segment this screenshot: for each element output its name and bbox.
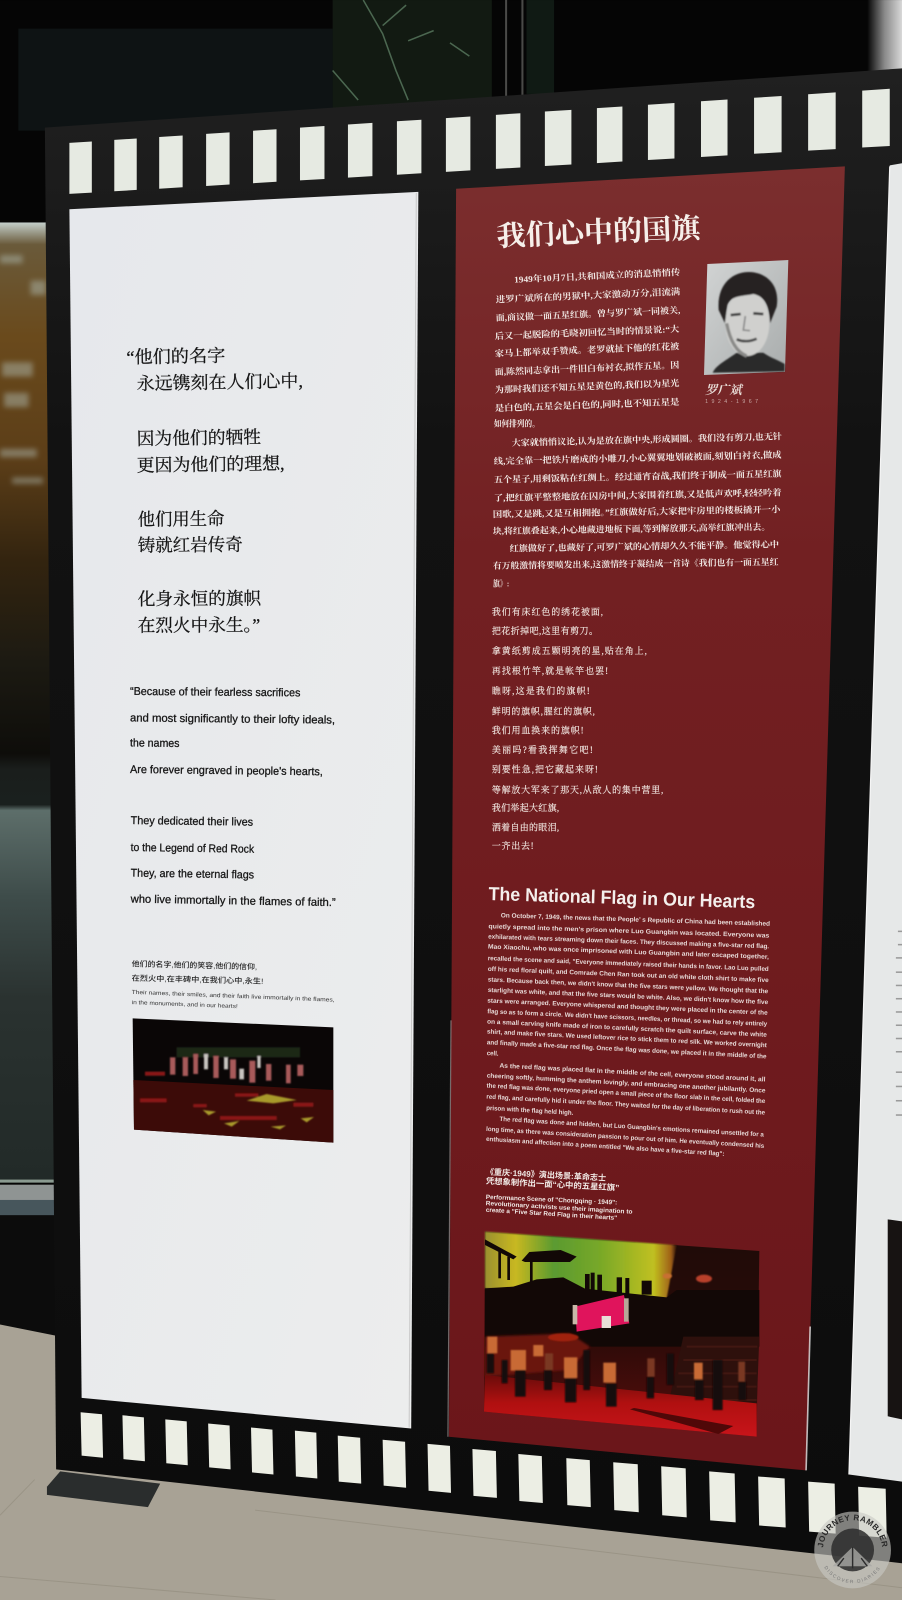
chinese story text: 线,完全靠一把铁片磨成的小雕刀,小心翼翼地划破被面,刻划白衬衣,做成 bbox=[494, 449, 782, 466]
chinese heading: 我们心中的国旗 bbox=[496, 213, 703, 253]
english quote: the names bbox=[130, 737, 180, 750]
english quote: and most significantly to their lofty ideals, bbox=[130, 712, 335, 727]
english story text: enthusiasm and affection into a poem entitled "We also have a five-star red flag": bbox=[486, 1136, 725, 1158]
small english caption: in the monuments, and in our hearts! bbox=[132, 1000, 238, 1010]
chinese story text: 旗》: bbox=[493, 578, 509, 589]
english story text: stars were arranged. Everyone whispered and thought they were placed in the center of the bbox=[487, 998, 768, 1017]
top sprocket holes bbox=[69, 89, 890, 194]
english story text: starlight was white, and that the five stars would be white. Also, we didn't know how the five bbox=[488, 987, 769, 1006]
poem: 再找根竹竿,就是帐竿也罢! bbox=[492, 665, 608, 676]
english quote: “Because of their fearless sacrifices bbox=[130, 686, 301, 699]
poem: 我们用血换来的旗帜! bbox=[492, 725, 584, 736]
chinese story text: 进罗广斌所在的男狱中,大家激动万分,泪流满 bbox=[496, 286, 681, 305]
chinese quote: 铸就红岩传奇 bbox=[138, 535, 243, 556]
chinese story text: 块,将红旗叠起来,小心地藏进地板下面,等到解放那天,高举红旗冲出去。 bbox=[493, 521, 770, 536]
lower dark wall bbox=[0, 1215, 61, 1336]
chinese story text: 大家就悄悄议论,认为是放在旗中央,形成圆圈。我们没有剪刀,也无针 bbox=[511, 430, 782, 448]
chinese story text bbox=[493, 266, 783, 589]
english story text: recalled the scene and said, "Everyone immediately raised their hands in favor. Lao Luo pulled bbox=[488, 955, 769, 973]
panel: far right white panel edge bbox=[849, 163, 902, 1482]
chinese quote: 在烈火中永生。” bbox=[138, 615, 260, 636]
watermark: Journey Rambler badge: JOURNEY RAMBLER bbox=[818, 1514, 888, 1548]
english story text: the red flag was done, everyone pried open a small piece of the floor slab in the cell, folded the bbox=[486, 1083, 766, 1105]
english story text: red flag, and carefully hid it under the floor. They waited for the day of liberation to rush out the bbox=[486, 1094, 766, 1117]
chinese story text: 为那时我们还不知五星是黄色的,我们以为星光 bbox=[495, 377, 680, 395]
english story text: Mao Xiaochu, who was once imprisoned with Luo Guangbin and later escaped together, bbox=[488, 944, 769, 961]
small chinese caption: 他们的名字,他们的笑容,他们的信仰, bbox=[132, 958, 257, 971]
english story text: flag so as to form a circle. We didn't have scissors, needles, or thread, so we had to rely entirely bbox=[487, 1008, 768, 1028]
english heading: The National Flag in Our Hearts bbox=[488, 883, 756, 912]
photo caption: 《重庆·1949》演出场景:革命志士 bbox=[486, 1166, 606, 1183]
photo: Chongqing 1949 stage scene bbox=[484, 1232, 759, 1437]
poem: 鲜明的旗帜,腥红的旗帜, bbox=[492, 705, 595, 716]
window with tree reflection bbox=[0, 222, 61, 1215]
poem: 洒着自由的眼泪, bbox=[492, 822, 559, 833]
english quote bbox=[130, 686, 336, 909]
english story text: On October 7, 1949, the news that the People’ s Republic of China had been established bbox=[501, 912, 770, 928]
chinese story text: 后又一起脱险的毛晓初回忆当时的情景说:“大 bbox=[495, 323, 680, 341]
poem: 瞧呀,这是我们的旗帜! bbox=[492, 685, 590, 696]
english story text: and finally made a five-star red flag. Once the flag was done, we placed it in the middle of the bbox=[487, 1039, 767, 1060]
english story text: cheering softly, humming the anthem lovingly, and embracing one another jubilantly. Once bbox=[487, 1073, 766, 1095]
english story text: long time, as there was consideration passion to pour out of him. He eventually condensed his bbox=[486, 1126, 765, 1150]
small english caption bbox=[132, 990, 335, 1010]
chinese quote bbox=[126, 346, 303, 636]
photo caption: Performance Scene of "Chongqing · 1949": bbox=[486, 1194, 617, 1206]
chinese story text: 有万般激情将要喷发出来,这激情终于凝结成一首诗《我们也有一面五星红 bbox=[493, 556, 779, 571]
poem: 等解放大军来了那天,从敌人的集中营里, bbox=[492, 784, 663, 795]
chinese quote: “他们的名字 bbox=[126, 346, 226, 367]
chinese story text: 是白色的,五星会是白色的,同时,也不知五星是 bbox=[495, 396, 680, 413]
poem: 一齐出去! bbox=[492, 840, 534, 851]
chinese story text: 面,商议做一面五星红旗。曾与罗广斌一同被关, bbox=[496, 304, 681, 323]
poem: 美丽吗?看我挥舞它吧! bbox=[492, 744, 593, 755]
poem: 把花折掉吧,这里有剪刀。 bbox=[492, 625, 598, 636]
poem: 我们有床红色的绣花被面, bbox=[492, 606, 603, 617]
portrait signature and dates: 1924-1967 bbox=[705, 399, 758, 405]
bottom sprocket holes bbox=[81, 1412, 887, 1538]
small english caption: Their names, their smiles, and their faith live immortally in the flames, bbox=[132, 990, 335, 1004]
english quote: They, are the eternal flags bbox=[131, 868, 255, 881]
portrait signature and dates: 罗广斌 bbox=[705, 383, 745, 397]
english story text bbox=[486, 912, 770, 1158]
chinese quote: 化身永恒的旗帜 bbox=[138, 588, 262, 609]
photo caption: create a "Five Star Red Flag in their hearts" bbox=[486, 1207, 617, 1222]
portrait of Luo Guangbin bbox=[704, 260, 788, 375]
english story text: off his red floral quilt, and Comrade Chen Ran took out an old white cloth shirt to make five bbox=[488, 966, 769, 984]
english story text: on a small carving knife made of iron to carefully scratch the quilt surface, carve the white bbox=[487, 1019, 767, 1039]
poem: 别要性急,把它藏起来呀! bbox=[492, 763, 598, 774]
watermark: Journey Rambler badge: DISCOVER DIARIES bbox=[824, 1566, 880, 1584]
chinese quote: 更因为他们的理想, bbox=[136, 452, 285, 475]
english quote: Are forever engraved in people's hearts, bbox=[130, 764, 323, 778]
poem: 拿黄纸剪成五颗明亮的星,贴在角上, bbox=[492, 645, 647, 656]
chinese quote: 因为他们的牺牲 bbox=[137, 427, 261, 449]
english story text: prison with the flag held high. bbox=[486, 1105, 574, 1117]
english story text: cell. bbox=[487, 1050, 499, 1058]
english story text: quietly spread into the men's prison where Luo Guangbin was located. Everyone was bbox=[488, 923, 770, 940]
english story text: shirt, and make five stars. We used leftover rice to stick them to red silk. We worked overnight bbox=[487, 1029, 768, 1049]
chinese quote: 他们用生命 bbox=[138, 509, 225, 530]
chinese story text: 家马上都举双手赞成。老罗就扯下他的红花被 bbox=[495, 340, 680, 359]
chinese story text: 1949年10月7日,共和国成立的消息悄悄传 bbox=[514, 266, 681, 285]
english story text: As the red flag was placed flat in the middle of the cell, everyone stood around it, all bbox=[499, 1063, 766, 1083]
panel: right red story panel bbox=[448, 166, 845, 1470]
english story text: exhilarated with tears streaming down their faces. They discussed making a five-star red flag. bbox=[488, 934, 769, 950]
frame foot bbox=[47, 1471, 160, 1507]
watermark: Journey Rambler badge bbox=[814, 1512, 891, 1588]
english quote: They dedicated their lives bbox=[131, 815, 254, 829]
english quote: who live immortally in the flames of faith.” bbox=[130, 894, 336, 909]
small chinese caption bbox=[132, 958, 263, 986]
chinese story text: 五个星子,用剩饭粘在红绸上。经过通宵奋战,我们终于制成一面五星红旗 bbox=[494, 468, 783, 485]
small chinese caption: 在烈火中,在丰碑中,在我们心中,永生! bbox=[132, 973, 263, 986]
chinese quote: 永远镌刻在人们心中, bbox=[136, 371, 303, 394]
chinese story text: 面,陈然同志拿出一件旧白布衬衣,拟作五星。因 bbox=[495, 359, 680, 377]
chinese story text: 如何排列的。 bbox=[494, 418, 540, 429]
english quote: to the Legend of Red Rock bbox=[131, 842, 255, 856]
english story text: The red flag was done and hidden, but Luo Guangbin's emotions remained unsettled for a bbox=[499, 1116, 764, 1139]
chinese story text: 了,把红旗平整整地放在囚房中间,大家围着红旗,又是低声欢呼,轻轻吟着 bbox=[494, 487, 782, 503]
photo caption: Revolutionary activists use their imagination to bbox=[486, 1200, 633, 1216]
photo: stage performance with flag floor bbox=[133, 1018, 333, 1143]
poem bbox=[492, 606, 663, 851]
photo caption bbox=[486, 1166, 633, 1222]
poem: 我们举起大红旗, bbox=[492, 802, 559, 813]
ground pavement bbox=[0, 1324, 902, 1600]
chinese story text: 国歌,又是跳,又是互相拥抱。”红旗做好后,大家把牢房里的楼板撬开一小 bbox=[493, 503, 782, 519]
panel: left white poem panel bbox=[69, 192, 418, 1429]
stage roofs and silhouettes bbox=[485, 1239, 759, 1347]
english story text: stars. Because back then, we didn't know that the five stars were yellow. We thought that the bbox=[488, 977, 769, 995]
photo caption: 凭想象制作出一面“心中的五星红旗” bbox=[486, 1176, 620, 1193]
chinese story text: 红旗做好了,也藏好了,可罗广斌的心情却久久不能平静。他觉得心中 bbox=[510, 538, 779, 554]
portrait signature and dates bbox=[705, 383, 758, 405]
